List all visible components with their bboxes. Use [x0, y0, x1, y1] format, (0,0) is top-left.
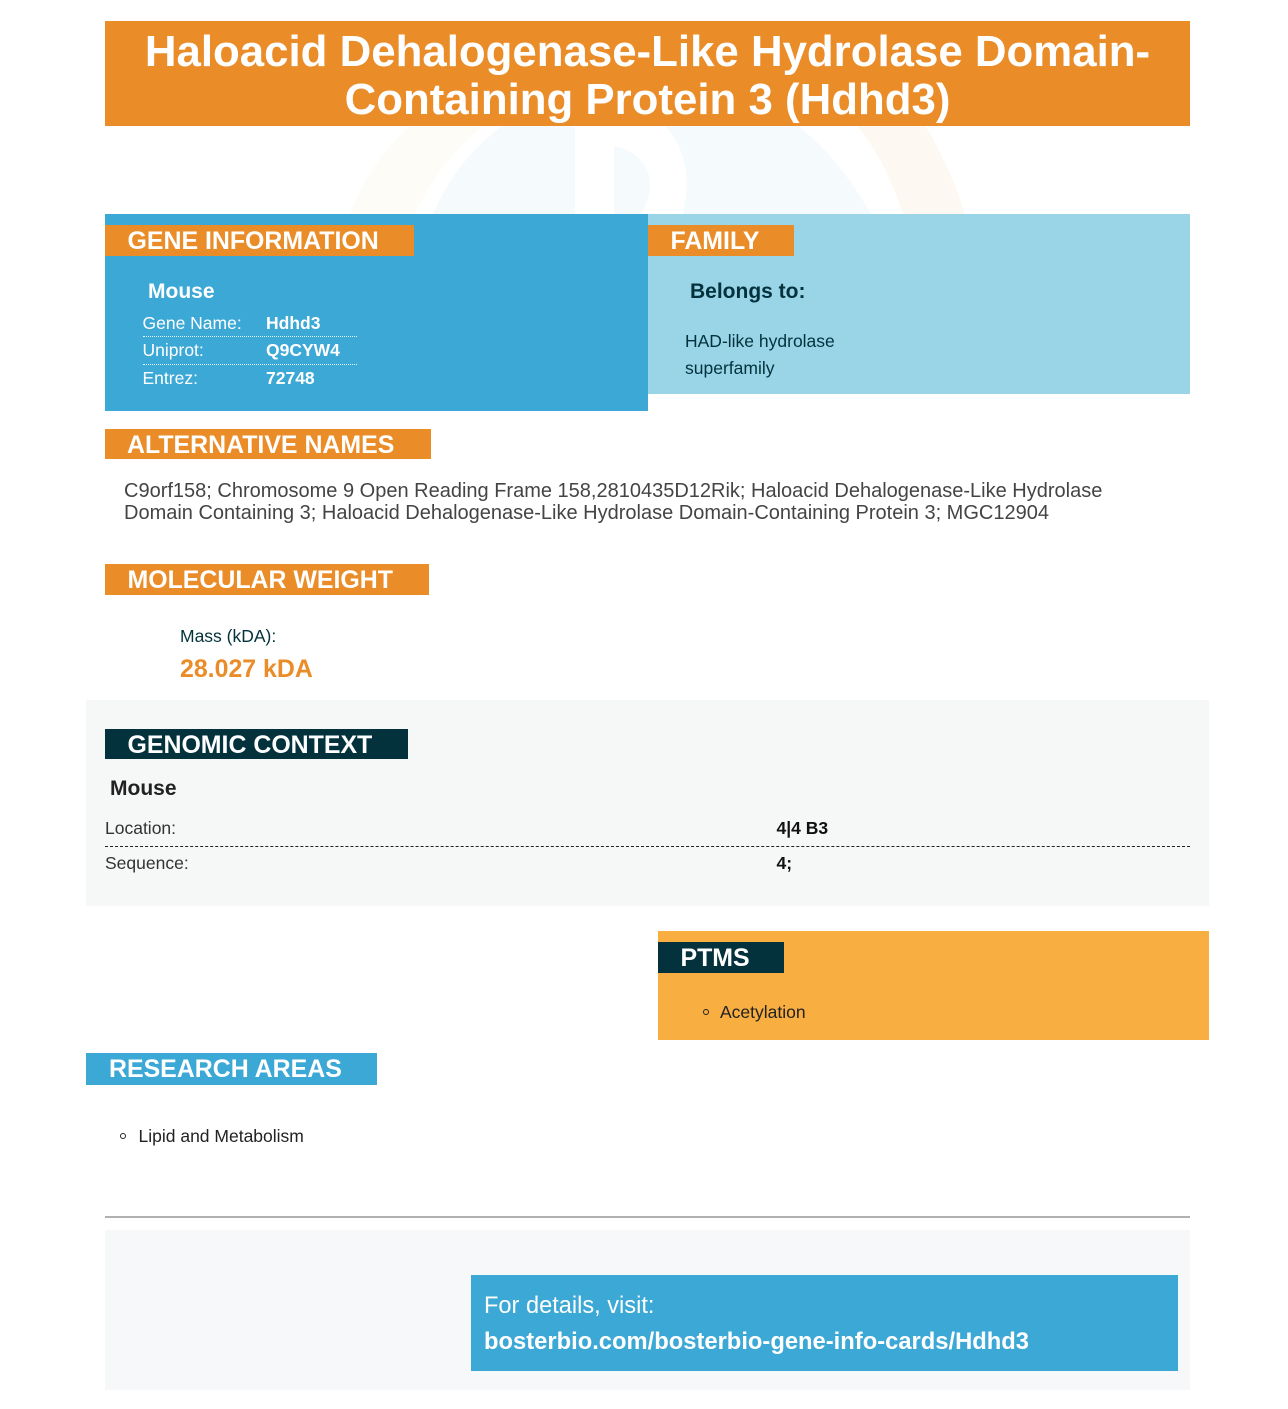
sequence row: Sequence: — [105, 853, 189, 873]
heading: alternative names: ALTERNATIVE NAMES — [127, 431, 394, 459]
title banner: Containing Protein 3 (Hdhd3) — [345, 75, 950, 124]
gene name row: Gene Name: — [142, 313, 242, 333]
species label: Mouse — [110, 777, 177, 800]
uniprot row — [142, 340, 356, 365]
alternative names text: Domain Containing 3; Haloacid Dehalogenase-Like Hydrolase Domain-Containing Protein 3; MGC12904 — [124, 502, 1049, 524]
heading: ptms: PTMS — [680, 944, 750, 972]
mass value: 28.027 kDA — [180, 655, 313, 683]
alternative names text: C9orf158; Chromosome 9 Open Reading Frame 158,2810435D12Rik; Haloacid Dehalogenase-Like Hydrolase — [124, 480, 1102, 502]
watermark logo — [350, 126, 965, 214]
entrez row — [142, 368, 315, 388]
title banner — [105, 21, 1190, 126]
location row: Location: — [105, 818, 176, 838]
heading: family — [648, 225, 794, 256]
footer panel — [105, 1230, 1190, 1390]
sequence row: 4; — [776, 853, 792, 873]
panel: genomic context — [86, 700, 1209, 906]
family text: superfamily — [685, 358, 774, 378]
family text — [685, 331, 835, 378]
footer rule — [105, 1216, 1190, 1218]
species label: Mouse — [148, 280, 215, 303]
research area list item: Lipid and Metabolism — [138, 1126, 304, 1146]
uniprot row: Q9CYW4 — [266, 340, 340, 360]
entrez row: 72748 — [266, 368, 315, 388]
heading: genomic context: GENOMIC CONTEXT — [128, 731, 372, 759]
heading: research areas: RESEARCH AREAS — [109, 1055, 342, 1083]
title banner: Haloacid Dehalogenase-Like Hydrolase Domain- — [145, 27, 1150, 76]
location row — [105, 818, 1190, 847]
panel: gene information — [105, 214, 648, 411]
family text: HAD-like hydrolase — [685, 331, 835, 351]
heading: ptms — [658, 942, 784, 973]
gene name row — [142, 313, 356, 337]
visit label: For details, visit: — [484, 1293, 654, 1319]
mass label: Mass (kDA): — [180, 626, 276, 646]
ptm list item: Acetylation — [720, 1002, 806, 1022]
call to action — [471, 1275, 1178, 1371]
entrez row: Entrez: — [142, 368, 198, 388]
panel: ptms — [658, 931, 1209, 1040]
gene name row: Hdhd3 — [266, 313, 320, 333]
url: bosterbio.com/bosterbio-gene-info-cards/Hdhd3 — [484, 1328, 1029, 1355]
panel: family — [648, 214, 1190, 394]
belongs to label: Belongs to: — [690, 280, 806, 303]
alternative names text — [124, 480, 1102, 524]
heading: molecular weight: MOLECULAR WEIGHT — [128, 566, 393, 594]
sequence row — [105, 853, 792, 873]
heading: gene information: GENE INFORMATION — [128, 227, 379, 255]
location row: 4|4 B3 — [776, 818, 828, 838]
uniprot row: Uniprot: — [142, 340, 204, 360]
heading: family: FAMILY — [670, 227, 759, 255]
